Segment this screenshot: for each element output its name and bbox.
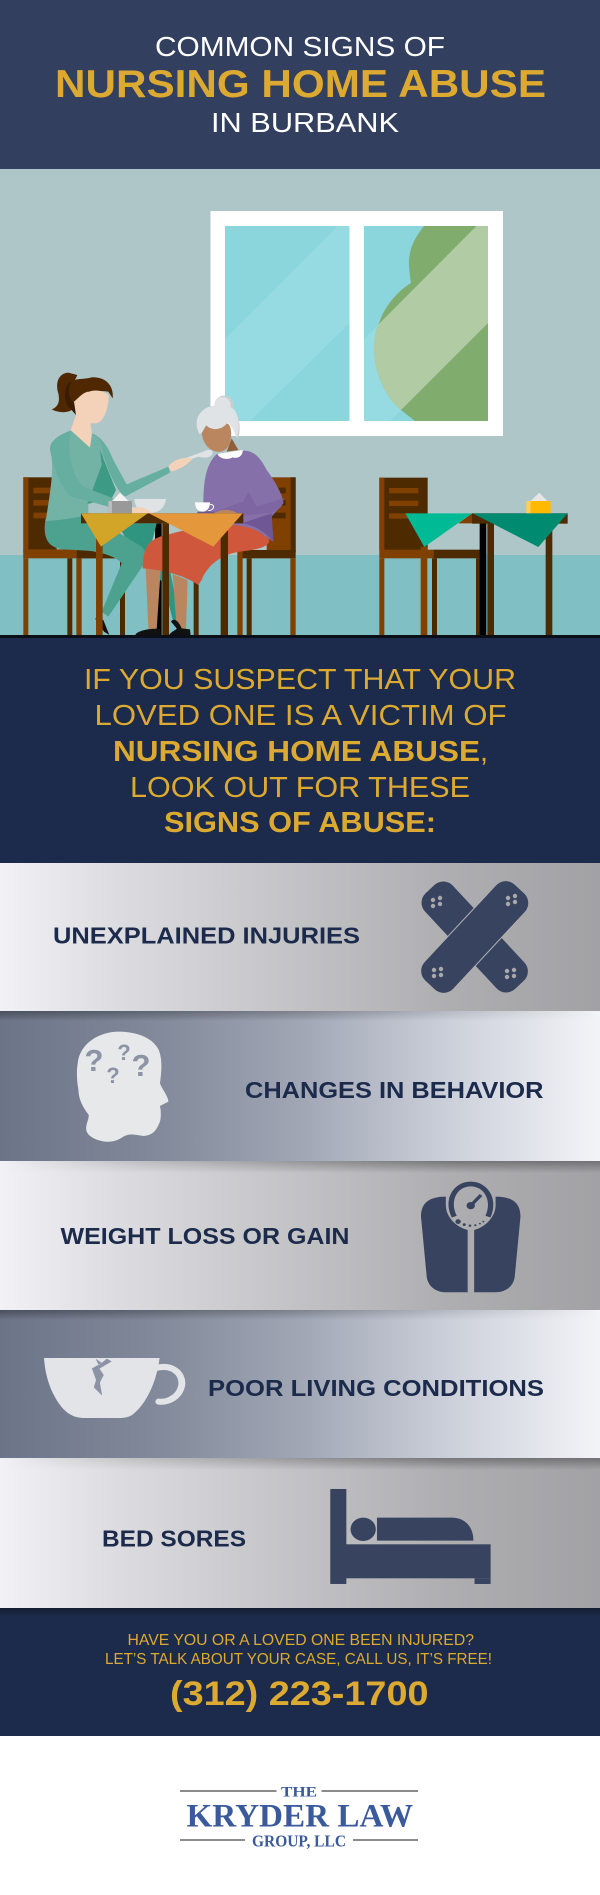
centre pole [155,523,162,636]
resident torso [203,451,283,542]
intro text: , [480,736,488,768]
icon: crossed bandages [416,876,534,998]
label: UNEXPLAINED INJURIES [53,922,360,948]
label: BED SORES [102,1526,246,1552]
title line 3: IN BURBANK [211,107,400,138]
logo: GROUP, LLC [252,1832,346,1850]
table top and legs [81,513,243,636]
call to action panel: LET’S TALK ABOUT YOUR CASE, CALL US, IT’S FREE! [105,1651,492,1668]
intro text: IF YOU SUSPECT THAT YOUR [84,664,516,696]
tissue box [108,493,132,513]
first table with nurse and resident [23,373,296,636]
logo: KRYDER LAW [186,1798,413,1834]
nurse torso [46,430,103,521]
band: unexplained injuries [0,863,600,1011]
intro text [84,664,516,839]
label: POOR LIVING CONDITIONS [208,1375,544,1401]
tablecloth yellow [81,513,148,547]
nurse pants [45,515,146,617]
intro text: NURSING HOME ABUSE [113,736,480,768]
nurse face and neck [71,391,109,448]
resident neck and collar [217,438,243,459]
intro panel [0,638,600,863]
title line 2: NURSING HOME ABUSE [55,63,546,106]
header banner [0,0,600,169]
intro text: SIGNS OF ABUSE: [164,807,436,839]
intro text: LOVED ONE IS A VICTIM OF [94,700,506,732]
nurse hair [52,373,113,416]
icon: head with question marks: ? [106,1063,120,1088]
teacup [195,502,214,513]
nurse far arm [92,433,170,497]
tablecloth orange [149,513,243,547]
icon: weighing scale [421,1184,520,1292]
nurse back leg [117,523,180,622]
spoon [180,450,213,462]
icon: head with question marks: ? [85,1043,103,1078]
label: WEIGHT LOSS OR GAIN [60,1223,350,1249]
label: CHANGES IN BEHAVIOR [245,1077,544,1103]
icon: head with question marks: ? [132,1048,150,1083]
logo: THE [281,1784,317,1800]
window [210,211,503,436]
band: bed sores [0,1458,600,1608]
logo [180,1784,418,1850]
nurse chair [23,477,125,636]
resident head [202,423,231,452]
nurse shoe [95,618,109,635]
band: changes in behavior [0,1011,600,1161]
call to action panel [0,1608,600,1736]
second table and chair [379,478,568,636]
resident skirt [143,525,269,585]
phone number: (312) 223-1700 [170,1675,428,1713]
resident legs and shoes [135,568,191,636]
resident hair [197,396,240,439]
nurse near arm [50,430,113,507]
nurse hand [168,458,193,472]
title line 1: COMMON SIGNS OF [155,31,445,62]
band: poor living conditions [0,1310,600,1458]
resident chair [194,477,296,636]
icon: head with question marks [77,1032,168,1142]
icon: head with question marks: ? [117,1040,131,1065]
icon: broken cup [44,1358,182,1418]
intro text: LOOK OUT FOR THESE [130,772,470,804]
band: weight loss or gain [0,1161,600,1310]
bowl [134,499,166,513]
call to action text: HAVE YOU OR A LOVED ONE BEEN INJURED? [128,1632,474,1649]
icon: person in bed [330,1489,491,1584]
illustration: dining room scene [0,169,600,638]
resident hand [213,510,237,514]
